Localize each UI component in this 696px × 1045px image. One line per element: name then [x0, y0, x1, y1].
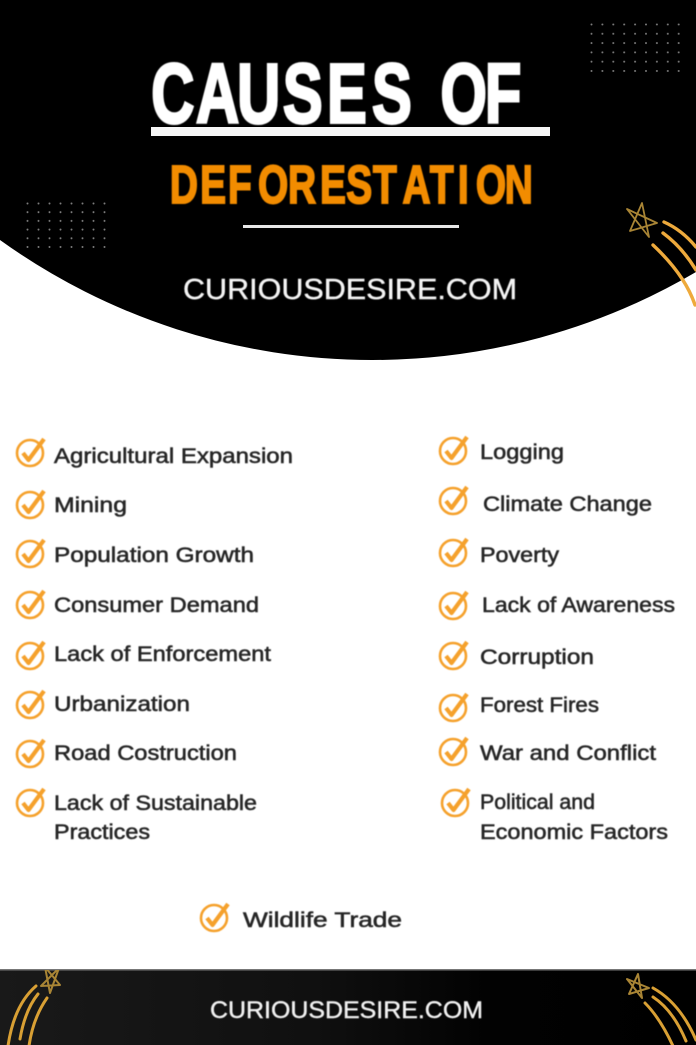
item: poverty: Poverty — [480, 543, 559, 567]
website label in header: CURIOUSDESIRE.COM — [183, 274, 517, 306]
item: consumer demand — [17, 591, 259, 618]
item: climate change — [440, 487, 652, 516]
item: mining — [17, 491, 127, 518]
item: lack of awareness — [440, 592, 675, 619]
item: lack of sustainable practices — [17, 789, 257, 844]
item: logging — [440, 437, 564, 464]
item: lack of sustainable practices: Lack of Sustainable — [54, 791, 257, 815]
item: consumer demand: Consumer Demand — [54, 593, 259, 617]
title: causes of: CAUSES OF — [151, 48, 521, 141]
item: wildlife trade: Wildlife Trade — [243, 908, 402, 932]
item: poverty — [440, 539, 559, 567]
item: population growth: Population Growth — [54, 543, 254, 567]
panel: black curved header — [0, 0, 696, 360]
item: political and economic factors: Political and — [480, 790, 595, 814]
icon: shooting star header — [627, 203, 696, 305]
decorative dot grid top right — [590, 23, 680, 73]
item: wildlife trade — [201, 904, 402, 932]
item: population growth — [17, 540, 254, 567]
item: lack of enforcement: Lack of Enforcement — [54, 642, 271, 666]
item: political and economic factors: Economic Factors — [480, 820, 668, 844]
item: war and conflict: War and Conflict — [480, 741, 656, 765]
item: road costruction — [17, 740, 237, 767]
panel: left column list — [17, 439, 293, 844]
decorative dot grid left — [26, 202, 110, 248]
item: lack of enforcement — [17, 642, 271, 669]
item: agricultural expansion: Agricultural Expansion — [54, 444, 293, 468]
item: urbanization — [17, 691, 190, 718]
item: forest fires — [440, 693, 599, 721]
item: lack of sustainable practices: Practices — [54, 820, 150, 844]
item: lack of awareness: Lack of Awareness — [482, 593, 675, 617]
item: mining: Mining — [54, 493, 127, 517]
website label in footer: CURIOUSDESIRE.COM — [210, 997, 483, 1024]
item: climate change: Climate Change — [483, 492, 652, 516]
item: urbanization: Urbanization — [54, 692, 190, 716]
short divider line — [243, 225, 459, 228]
heading: deforestation: DEFORESTATION — [170, 154, 533, 214]
item: war and conflict — [440, 738, 656, 765]
item: agricultural expansion — [17, 439, 293, 468]
panel: right column list — [440, 437, 675, 844]
item: corruption: Corruption — [480, 645, 594, 669]
title underline — [151, 127, 550, 136]
item: corruption — [440, 642, 594, 669]
item: road costruction: Road Costruction — [54, 741, 237, 765]
item: logging: Logging — [480, 440, 564, 464]
item: political and economic factors — [442, 789, 668, 844]
icon: shooting star footer right — [627, 974, 696, 1045]
panel: footer bar — [0, 969, 696, 1045]
icon: shooting star footer left — [8, 967, 60, 1045]
item: forest fires: Forest Fires — [480, 693, 599, 717]
